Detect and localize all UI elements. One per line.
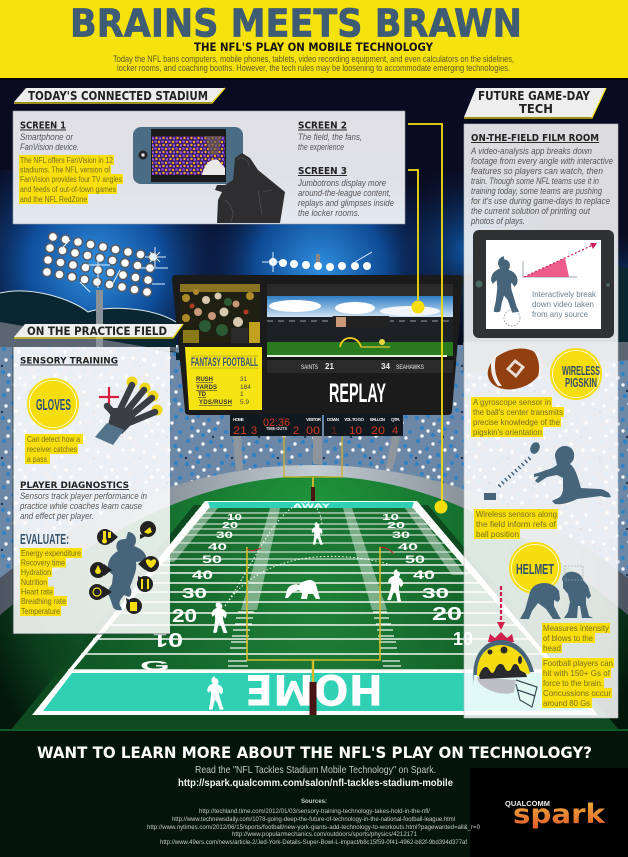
evaluate list [20,548,82,616]
left floodlight [42,232,168,348]
wireless sensors highlighted text: the field inform refs of [476,519,557,529]
dark hills behind the stands [0,266,628,372]
scoreboard support pillars [233,436,400,472]
icon: linemen colliding [520,572,593,619]
screen 1 text: Smartphone or [20,132,74,142]
sources: http://www.popularmechanics.com/outdoors/sports/physics/4212171 [232,831,417,838]
yard numbers right: 30 [392,530,410,540]
near goal post [247,547,394,715]
stadium wall and turf surround [0,465,628,731]
center floodlight [262,252,372,272]
spark article text: Read the "NFL Tackles Stadium Mobile Technology" on Spark. [195,764,436,776]
badge: wireless pigskin [550,348,602,400]
fantasy football stats card: YARDS [196,385,217,391]
crowd photo [180,284,260,343]
sources: Sources: [301,798,327,805]
screen 1 text [20,120,79,152]
concussion text: force to the brain. [543,678,603,688]
screen 3 text: SCREEN 3 [298,166,347,177]
sources: http://techland.time.com/2012/01/03/sensory-training-technology-takes-hold-in-the-nfl/ [199,808,430,815]
yard numbers left: 40 [192,568,213,582]
badge: gloves [27,378,79,430]
home end zone: HOME [245,665,383,714]
yard numbers right: 30 [422,585,449,602]
subtitle: THE NFL'S PLAY ON MOBILE TECHNOLOGY [194,40,434,54]
heading: future game-day tech [464,88,606,118]
screen 1 highlighted note: FanVision provides four TV angles [20,174,122,184]
yard numbers right: 20 [432,604,462,624]
footer heading: WANT TO LEARN MORE ABOUT THE NFL'S PLAY ON TECHNOLOGY? [37,743,592,762]
screen 3 text: Jumbotrons display more [297,178,386,188]
scoreboard: VISITOR [306,417,322,422]
concussion text: around 80 Gs [543,698,590,708]
icon: player silhouette [107,532,146,610]
panel: connected stadium [13,111,405,224]
fantasy football stats card: 1 [240,391,244,398]
yard numbers right: 40 [413,568,436,582]
film room text: A video-analysis app breaks down [470,146,592,156]
evaluate list: Heart rate [21,586,53,596]
scoreboard: BALL ON [370,417,385,422]
screen 1 text: SCREEN 1 [20,120,66,132]
panel: future game-day tech [464,124,618,718]
icon: hand holding phone [215,153,285,223]
fantasy football stats card: 31 [240,376,248,383]
player diagnostics text: practice while coaches learn cause [19,501,142,511]
concussion text: Football players can [543,658,613,668]
stadium stands crowd [0,345,628,625]
player diagnostics heading: PLAYER DIAGNOSTICS [20,481,129,491]
yard numbers right [382,513,473,649]
fantasy football stats card: TD [198,392,207,398]
screen 3 text [297,166,394,218]
gloves highlighted text: receiver catches [27,444,77,454]
film room text [470,146,613,226]
icon: helmet with impact [473,632,537,707]
film room heading: ON-THE-FIELD FILM ROOM [471,133,599,144]
yard numbers right: 20 [387,521,406,530]
scoreboard: HOME [233,417,244,422]
players on field [207,522,406,710]
panel: practice field [13,347,170,634]
evaluate list: Temperature [21,606,60,616]
fantasy football stats card [185,347,262,410]
measures intensity text [542,623,610,653]
scoreboard: 4 [392,425,398,437]
badge: helmet: HELMET [516,561,554,578]
sources [147,798,480,846]
evaluate list: Breathing rate [21,596,66,606]
video game screen [267,284,453,373]
fantasy football stats card: YDS/RUSH [199,400,232,406]
yard numbers left [140,513,243,673]
screen 2 text: the experience [298,142,344,152]
away end zone [208,502,414,510]
yard numbers right: 50 [405,554,425,566]
measures intensity text: Measures intensity [543,623,610,633]
title: BRAINS MEETS BRAWN [70,2,522,46]
yard numbers left: 40 [208,542,227,552]
icon: glove with sensor cross [95,376,162,445]
yard numbers right: 10 [382,513,400,522]
wireless sensors highlighted text [474,509,558,539]
scoreboard: DOWN [327,417,339,422]
footer [0,729,628,857]
tablet: from any source [532,309,588,319]
scoreboard: TIME-OUTS [266,426,287,431]
tablet: Interactively break [532,289,597,299]
intro text: locker rooms, and coaching booths. However, the tech rules may be loosening to accommodate emerging technologies. [117,63,510,73]
sources: http://www.nytimes.com/2012/06/15/sports/football/new-york-giants-add-technology-to-workouts.html?pagewanted=all&_r=0 [147,824,480,831]
badge: helmet [509,542,561,594]
yard numbers left: 10 [227,513,243,522]
intro text: Today the NFL bans computers, mobile phones, tablets, video recording equipment, and even calculators on the sidelines, [113,54,514,64]
player diagnostics text: Sensors track player performance in [20,491,147,501]
screen 1 highlighted note: and feeds of out-of-town games [20,184,116,194]
spark article text [178,764,453,789]
scoreboard: 3 [251,425,257,437]
badge: gloves: GLOVES [36,397,71,414]
wireless sensors highlighted text: ball position [476,529,519,539]
fantasy football stats card: RUSH [196,377,213,383]
hash strips [162,508,465,610]
wireless sensors highlighted text: Wireless sensors along [476,509,557,519]
screen 1 highlighted note [19,155,123,204]
gyroscope highlighted text: the ball's center transmits [473,407,563,417]
scoreboard: 10 [349,425,362,437]
icon: phone [133,127,243,184]
film room text: photos of plays. [470,216,525,226]
icon: receiver catching ball [484,441,611,504]
badge: wireless pigskin: PIGSKIN [565,375,597,390]
gloves highlighted text: a pass [27,454,47,464]
sources: http://www.49ers.com/news/article-2/Jed-York-Details-Super-Bowl-L-impact/b8c15f59-0f41-4962-b82f-9bd394d377af [160,839,467,846]
yard numbers left: G [140,658,170,673]
gloves highlighted text [25,434,83,464]
scoreboard: 1 [331,425,337,437]
evaluate heading: EVALUATE: [20,531,69,548]
film room text: footage from every angle with interactive [471,156,613,166]
screen 2 text [298,120,362,152]
screen 1 highlighted note: and the NFL RedZone [20,194,87,204]
heading: future game-day tech: TECH [519,102,553,116]
video game screen: SEAHAWKS [396,365,424,371]
tablet: down video taken [532,299,594,309]
gyroscope highlighted text: A gyroscope sensor in [473,397,551,407]
scoreboard: YDL TO GO [344,417,364,422]
badge: wireless pigskin: WIRELESS [562,363,600,378]
qualcomm spark logo: QUALCOMM [505,799,550,808]
qualcomm spark logo: spark [513,799,606,830]
connector lines [408,124,448,514]
film room text: features so players can watch, then [471,166,603,176]
dotted impact box [565,566,583,580]
heading: on the practice field: ON THE PRACTICE FIELD [27,324,167,338]
film room text: training today, some teams are pushing [471,186,602,196]
yard numbers left: 30 [216,530,233,540]
concussion text: hit with 150+ Gs of [543,668,611,678]
film room text: train. Though some NFL teams use it in [471,176,599,186]
icons: sensor pins [89,521,159,614]
video game screen: 34 [381,362,390,371]
jumbotron [172,275,463,415]
yard numbers left: 01 [153,628,183,650]
yard numbers left: 30 [182,585,207,602]
scoreboard: 20 [371,425,385,437]
gloves highlighted text: Can detect how a [27,434,80,444]
film room text: for it's use during game-days to replace [471,196,610,206]
screen 2 text: The field, the fans, [298,132,362,142]
fantasy football stats card: 184 [240,384,251,391]
heading: today's connected stadium: TODAY'S CONNECTED STADIUM [28,89,208,103]
scoreboard: 2 [293,425,299,437]
screen 1 highlighted note: stadiums. The NFL version of [20,164,111,174]
screen 3 text: around-the-league content, [298,188,391,198]
yard numbers right: 40 [398,542,418,552]
yard numbers left: 20 [222,521,239,530]
scoreboard: 21 [233,425,247,437]
evaluate list: Hydration [21,567,51,577]
film room text: the current solution of printing out [471,206,590,216]
concussion text [542,658,614,708]
header banner [0,0,628,80]
yard numbers left: 20 [172,606,197,626]
home end zone [43,665,590,714]
player diagnostics text: and effect per player. [20,511,94,521]
evaluate list: Energy expenditure [21,548,81,558]
scoreboard: 02:36 [263,417,290,429]
yard numbers right: 10 [453,629,473,649]
concussion text: Concussions occur [543,688,611,698]
measures intensity text: of blows to the [543,633,593,643]
away end zone: AWAY [293,502,331,510]
screen 2 text: SCREEN 2 [298,120,347,132]
icon: football [482,342,548,396]
pass trajectory dotted lines [225,502,392,606]
fantasy football stats card: FANTASY FOOTBALL [191,357,258,369]
red impact arrow [497,586,505,630]
qualcomm spark logo [470,768,628,857]
video game screen: 21 [325,362,334,371]
gyroscope highlighted text: pigskin's orientation [473,427,542,437]
evaluate list: Nutrition [21,577,47,587]
screen 3 text: the locker rooms. [298,208,360,218]
sensory training heading: SENSORY TRAINING [20,356,118,366]
video game screen: SAINTS [301,365,318,371]
yard numbers left: 50 [202,554,222,566]
yard lines [68,513,554,670]
replay label: REPLAY [329,378,386,408]
gyroscope highlighted text: precise knowledge of the [473,417,560,427]
gyroscope highlighted text [471,397,564,437]
night sky background [0,78,628,360]
tablet [473,230,614,338]
screen 3 text: replays and glimpses inside [298,198,394,208]
scoreboard: QTR. [391,417,400,422]
scoreboard [230,414,403,437]
measures intensity text: head [543,643,561,653]
fantasy football stats card: 5.9 [240,399,249,406]
scoreboard: 00 [306,425,320,437]
sources: http://www.technewsdaily.com/1078-going-deep-the-future-of-technology-in-the-national-football-league.html [172,816,456,823]
field [10,501,620,731]
heading: future game-day tech: FUTURE GAME-DAY [478,89,590,103]
evaluate list: Recovery time [21,558,65,568]
screen 1 highlighted note: The NFL offers FanVision in 12 [20,155,113,165]
spark article text: http://spark.qualcomm.com/salon/nfl-tackles-stadium-mobile [178,777,453,789]
intro text [113,54,514,73]
screen 1 text: FanVision device. [20,142,79,152]
player diagnostics text [19,491,147,521]
far goal post [284,436,342,501]
